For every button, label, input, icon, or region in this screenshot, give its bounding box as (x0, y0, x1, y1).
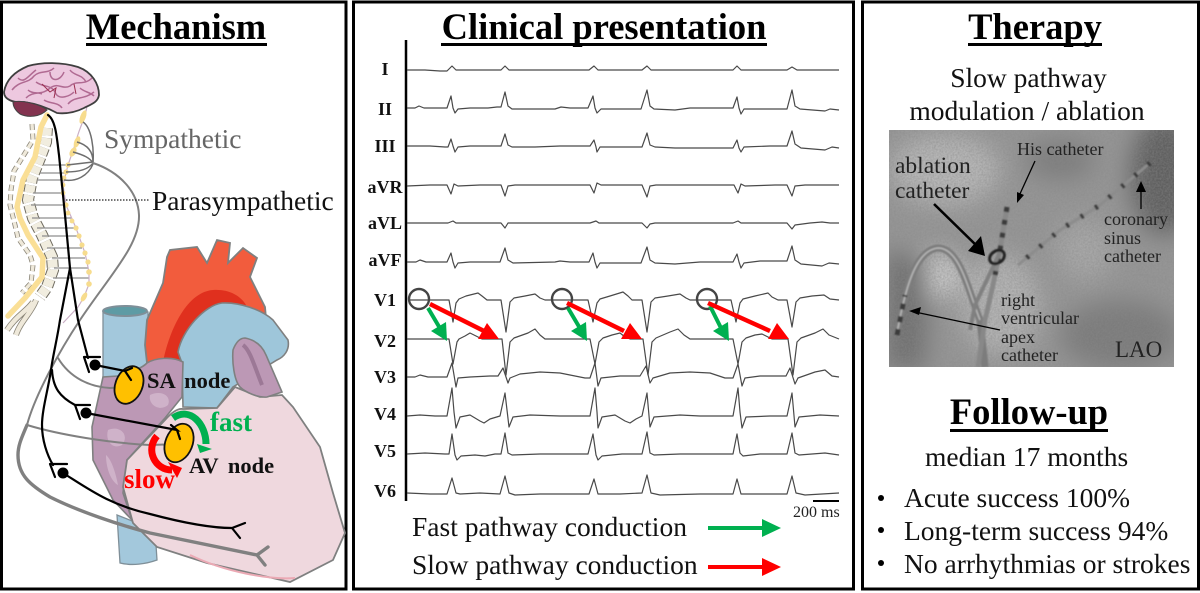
heading: Follow-up: Follow-up (950, 391, 1108, 432)
fluoroscopy image (889, 130, 1174, 367)
ECG lead labels: V5 (374, 441, 396, 461)
heart: ventricle (123, 387, 345, 582)
leader line: Parasympathetic (66, 199, 150, 201)
icon: sympathetic ganglia nerves (64, 122, 93, 180)
scale bar: 200 ms (793, 504, 840, 521)
heading: Clinical presentation: Clinical presentation (442, 6, 766, 47)
ECG lead labels: aVL (368, 213, 402, 233)
ECG lead labels: V2 (374, 331, 396, 351)
fluoroscopy labels: sinus (1104, 228, 1141, 248)
icon: spinal column (7, 115, 89, 335)
P wave circles (409, 289, 717, 309)
icon: SA node (109, 362, 149, 408)
text: slow pathway modulation: modulation / ablation (909, 95, 1145, 126)
icon: ganglion dots (58, 360, 100, 478)
fluoroscopy labels: His catheter (1017, 139, 1103, 159)
fluoroscopy labels: coronary (1104, 209, 1168, 229)
ECG lead labels: V6 (374, 481, 396, 501)
icon: sympathetic chain (61, 105, 92, 323)
fluoroscopy labels: catheter (1001, 345, 1058, 365)
ECG lead labels: V4 (374, 404, 396, 424)
heart: inferior and superior vena cava (103, 306, 157, 564)
nerve: sympathetic grey fibres (18, 163, 268, 565)
legend: slow pathway conduction: Slow pathway conduction (412, 549, 698, 580)
arrow: fast pathway (173, 414, 212, 453)
ECG traces (407, 66, 839, 495)
ECG lead labels: aVR (368, 177, 403, 197)
fluoroscopy labels: right (1001, 290, 1035, 310)
list: outcomes: Acute success 100% (904, 482, 1130, 513)
heading: Therapy: Therapy (968, 6, 1102, 47)
arrow: slow pathway (152, 436, 182, 478)
heart: right atrium (92, 358, 183, 520)
fluoroscopy labels: catheter (1104, 246, 1161, 266)
ECG lead labels: V3 (374, 367, 396, 387)
label: slow: slow (124, 464, 176, 494)
ECG lead labels: II (378, 99, 392, 119)
ECG lead labels: aVF (368, 250, 402, 270)
ECG lead labels: I (381, 59, 389, 79)
list: outcomes (878, 482, 1190, 579)
fluoroscopy labels: apex (1001, 327, 1035, 347)
heart: pulmonary artery (178, 303, 288, 408)
label: fast: fast (210, 407, 252, 437)
fluoroscopy labels (895, 139, 1168, 365)
text: slow pathway modulation (909, 62, 1145, 126)
legend: fast pathway conduction: Fast pathway conduction (412, 511, 687, 542)
ECG lead labels (368, 59, 403, 501)
icon: brain (4, 63, 99, 116)
ECG lead labels: III (374, 136, 396, 156)
label: SA node: SA node (147, 368, 230, 393)
list: outcomes: No arrhythmias or strokes (904, 548, 1190, 579)
fluoroscopy labels: ventricular (1001, 308, 1079, 328)
text: median follow-up: median 17 months (925, 441, 1128, 472)
fluoroscopy arrows (909, 161, 1146, 330)
heart: left atrial appendage (233, 338, 282, 397)
green arrows: fast pathway conduction (428, 306, 729, 341)
label: Sympathetic: Sympathetic (104, 123, 241, 154)
heart: aorta (145, 240, 268, 368)
label: Parasympathetic: Parasympathetic (152, 185, 334, 216)
label: AV node: AV node (189, 453, 274, 478)
catheters (897, 163, 1150, 367)
text: slow pathway modulation: Slow pathway (950, 62, 1107, 93)
fluoroscopy labels: catheter (895, 178, 970, 204)
fluoroscopy labels: ablation (895, 153, 971, 179)
heading: Mechanism: Mechanism (86, 6, 266, 47)
fluoroscopy labels: LAO (1115, 337, 1162, 362)
nerve: parasympathetic black fibres (42, 115, 245, 538)
ECG lead labels: V1 (374, 290, 396, 310)
panel: clinical presentation (354, 2, 854, 589)
list: outcomes: Long-term success 94% (904, 515, 1168, 546)
panel: mechanism (2, 2, 346, 589)
chart axis (405, 40, 407, 501)
icon: AV node (159, 419, 199, 467)
panel: therapy (862, 2, 1200, 589)
red arrows: slow pathway conduction (430, 303, 789, 339)
